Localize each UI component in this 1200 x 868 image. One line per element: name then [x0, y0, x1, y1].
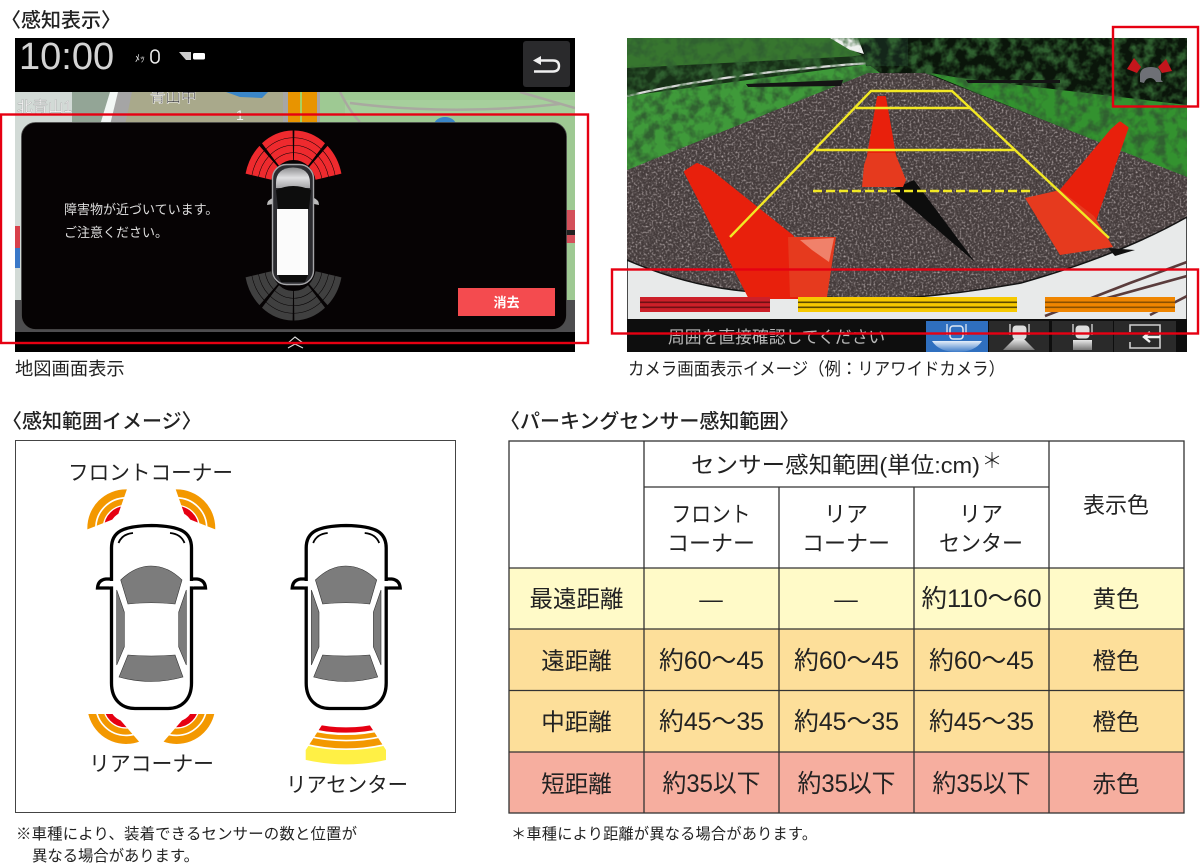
row: farthest: —: [834, 586, 858, 612]
dialog message: [64, 202, 218, 240]
highlight frame: map dialog: [1, 114, 588, 343]
title: detection range image: 〈感知範囲イメージ〉: [2, 409, 202, 433]
note: sensors vary by model: 異なる場合があります。: [32, 847, 199, 865]
car diagram: corners: [98, 526, 206, 708]
row: middle: 約45〜35: [659, 708, 764, 736]
parking guide lines: [730, 91, 1109, 238]
dialog message: ご注意ください。: [64, 225, 168, 240]
row: middle: 中距離: [541, 709, 612, 735]
car top view: [267, 164, 319, 284]
column headers: コーナー: [667, 531, 755, 556]
car bumper: [627, 217, 1187, 320]
map background: 1: [236, 107, 244, 123]
sensor bar: red: [640, 297, 770, 312]
view button: back: [1114, 321, 1176, 352]
corner sensor icon: [1127, 58, 1172, 83]
note: distance varies by model: ＊車種により距離が異なる場合があります。: [511, 826, 817, 843]
front corner sensor arcs: [91, 493, 211, 563]
bottom message bar: 周囲を直接確認してください: [668, 328, 885, 347]
row: short: 赤色: [1092, 771, 1140, 797]
table grid: [509, 441, 1184, 813]
highlight frame: sensor bars: [612, 270, 1198, 334]
column headers: [667, 493, 1149, 556]
row: farthest: —: [699, 586, 723, 612]
row: short: 短距離: [541, 771, 612, 797]
status icons: ﾒｯ: [135, 54, 145, 65]
dismiss button: 消去: [493, 295, 520, 310]
row: middle: 橙色: [1092, 709, 1140, 735]
row: farthest: 約110〜60: [922, 585, 1042, 613]
status bar time: 10:00: [19, 36, 114, 78]
cone: centre: [862, 97, 906, 187]
background scenery: [627, 38, 1187, 320]
status icons: [135, 50, 205, 65]
header: sensor range: ＊: [982, 450, 1002, 473]
map background: 北青山1: [17, 98, 72, 116]
sensor arcs rear (grey): [229, 194, 358, 338]
cone: right: [1025, 123, 1135, 256]
bottom message bar: [628, 319, 1186, 345]
column headers: リア: [959, 502, 1003, 527]
row: far: 橙色: [1092, 648, 1140, 674]
title: parking sensor detection range: 〈パーキングセンサー感知範囲〉: [500, 409, 799, 433]
view button: wide (active): [926, 321, 988, 352]
view button: top: [1052, 321, 1113, 352]
alert dialog: [22, 113, 566, 338]
caption: camera screen: カメラ画面表示イメージ（例：リアワイドカメラ）: [628, 359, 1005, 379]
rear corner sensor arcs: [91, 670, 211, 740]
row: far: 約60〜45: [659, 647, 764, 675]
back button: [523, 41, 570, 87]
row: farthest: 黄色: [1092, 586, 1140, 612]
dialog message: 障害物が近づいています。: [64, 202, 218, 217]
chevron: [288, 337, 303, 348]
column headers: フロント: [672, 502, 750, 527]
highlight frame: corner icon: [1113, 27, 1198, 106]
row: short: 約35以下: [932, 770, 1030, 798]
cone shadow: [891, 180, 975, 262]
rear centre sensor arcs: [306, 725, 386, 764]
column headers: コーナー: [802, 531, 890, 556]
panel: camera screen: [627, 38, 1187, 352]
car diagram: rear centre: [292, 526, 400, 708]
label: front corner: フロントコーナー: [68, 462, 233, 485]
label: rear centre: リアセンター: [286, 774, 408, 797]
row: short: 約35以下: [798, 770, 896, 798]
title: detection display: 〈感知表示〉: [1, 8, 121, 32]
view button: normal: [989, 321, 1049, 352]
note: sensors vary by model: ※車種により、装着できるセンサーの数と位置が: [16, 825, 357, 843]
note: sensors vary by model: [16, 825, 357, 865]
panel: map screen: [15, 36, 575, 352]
sensor bar: orange: [1045, 297, 1175, 312]
row: farthest: 最遠距離: [530, 586, 624, 612]
column headers: センター: [939, 531, 1023, 556]
dismiss button: [458, 288, 555, 316]
map background: 青山中: [150, 88, 197, 106]
sensor bar: yellow: [798, 297, 1017, 312]
label: rear corner: リアコーナー: [89, 753, 214, 776]
panel: detection range image: [15, 440, 456, 813]
row: short: 約35以下: [662, 770, 760, 798]
column headers: リア: [824, 502, 868, 527]
table: detection range: [509, 441, 1184, 813]
row: middle: 約45〜35: [794, 708, 899, 736]
row: far: 約60〜45: [929, 647, 1034, 675]
row: farthest: [530, 585, 1140, 613]
row: middle: 約45〜35: [929, 708, 1034, 736]
sensor arcs front (red): [229, 113, 358, 257]
bumper reflections: [1045, 262, 1187, 316]
row: far: 遠距離: [541, 648, 612, 674]
caption: map screen: 地図画面表示: [15, 358, 125, 379]
table row backgrounds: [509, 441, 1184, 813]
column headers: 表示色: [1083, 493, 1149, 518]
row: far: 約60〜45: [794, 647, 899, 675]
header: sensor range: センサー感知範囲(単位:cm): [691, 453, 980, 478]
map background: [15, 88, 575, 332]
row: middle: [541, 708, 1140, 736]
row: far: [541, 647, 1140, 675]
row: short: [541, 770, 1140, 798]
cone: left: [686, 165, 836, 297]
